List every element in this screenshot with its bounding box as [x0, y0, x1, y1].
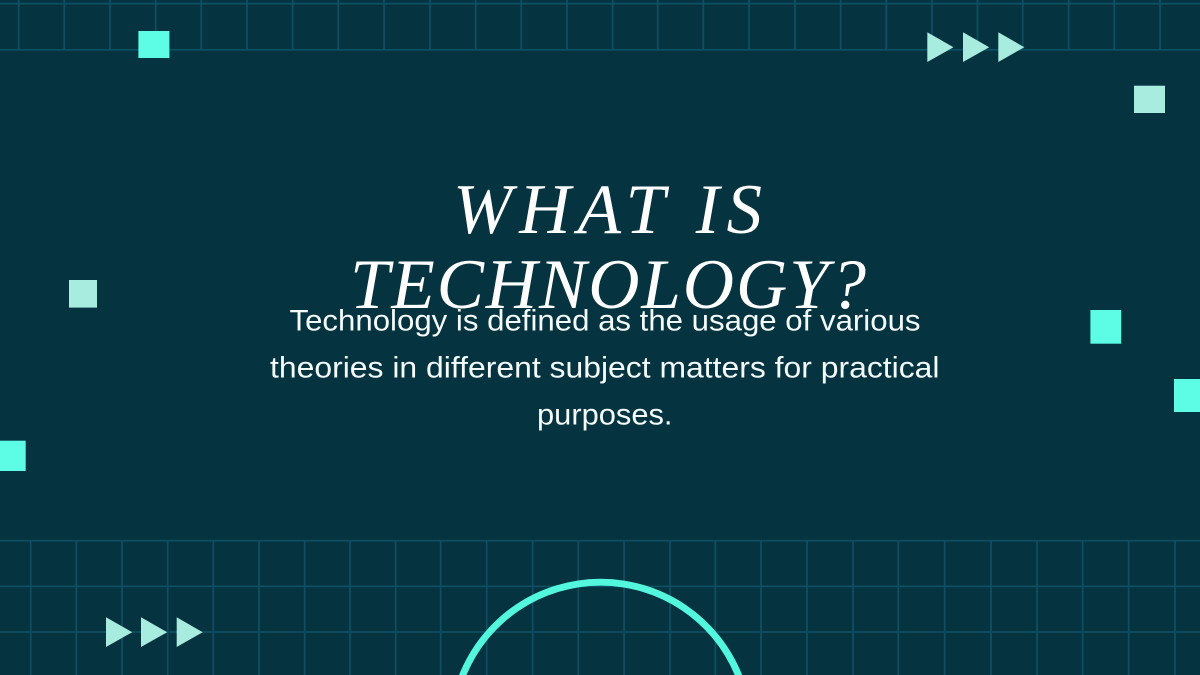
square: mid right: [1090, 310, 1121, 344]
title: [350, 171, 866, 324]
body text: theories in different subject matters for practical: [270, 352, 940, 385]
title: WHAT IS: [453, 171, 762, 249]
square: top right: [1134, 86, 1165, 113]
bottom grid pattern: [0, 540, 1200, 675]
square: right edge: [1174, 379, 1200, 412]
bottom semicircle ring: [459, 579, 742, 675]
body text: Technology is defined as the usage of various: [290, 305, 920, 338]
title: TECHNOLOGY?: [350, 246, 866, 324]
square: top left: [138, 31, 169, 58]
top grid pattern: [0, 0, 1200, 50]
body text: [270, 305, 940, 431]
body text: purposes.: [537, 398, 672, 431]
arrows: top right triple triangle: [927, 32, 1024, 62]
square: lower left edge: [0, 441, 26, 471]
arrows: bottom left triple triangle: [106, 617, 203, 647]
square: mid left: [69, 280, 97, 308]
